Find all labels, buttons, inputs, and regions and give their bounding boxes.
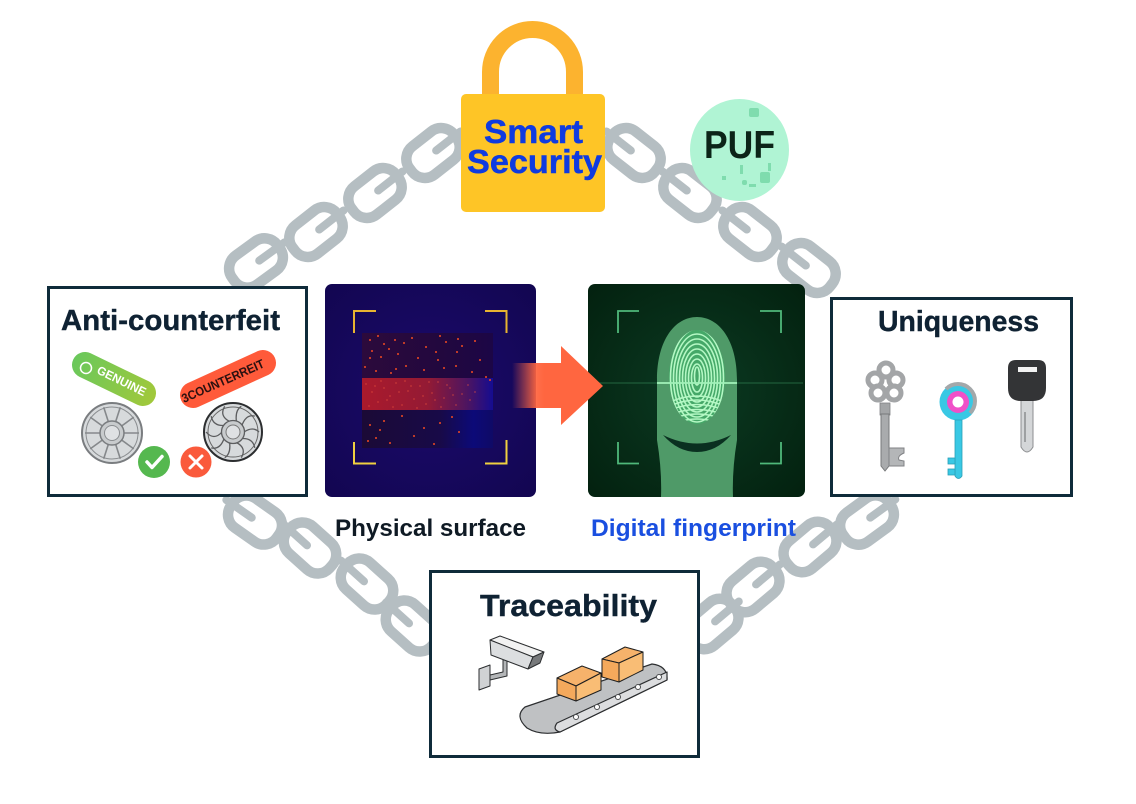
arrow: surface to fingerprint bbox=[512, 346, 603, 425]
panel: digital fingerprint scan bbox=[588, 284, 805, 497]
parcel: rear box bbox=[602, 647, 643, 682]
conveyor belt bbox=[520, 664, 667, 733]
icon: padlock bbox=[461, 30, 605, 212]
icon: cross mark bbox=[180, 446, 212, 478]
counterfeit label: 3COUNTERREIT bbox=[180, 357, 267, 406]
scan line bbox=[590, 382, 803, 384]
padlock label: Smart bbox=[484, 113, 583, 150]
heading: anti-counterfeit: Anti-counterfeit bbox=[61, 305, 280, 337]
caption: digital fingerprint: Digital fingerprint bbox=[591, 515, 796, 542]
icon: cyan key bbox=[940, 384, 976, 478]
scan corner brackets bbox=[618, 311, 781, 464]
icon: car key bbox=[1008, 360, 1046, 452]
badge: PUF bbox=[690, 99, 789, 201]
counterfeit wheel bbox=[204, 403, 262, 461]
heading: traceability: Traceability bbox=[480, 588, 658, 623]
chain: upper left bbox=[223, 117, 472, 294]
panel: physical surface scan bbox=[325, 284, 536, 497]
chain: upper right bbox=[595, 117, 842, 299]
chain: lower left bbox=[216, 485, 445, 658]
nail crescent bbox=[663, 435, 731, 452]
caption: physical surface: Physical surface bbox=[335, 515, 526, 542]
finger bbox=[657, 317, 737, 497]
scan corner brackets bbox=[354, 311, 506, 464]
icon: security camera bbox=[479, 636, 544, 690]
panel: anti-counterfeit bbox=[48, 288, 306, 496]
fingerprint bbox=[669, 329, 725, 427]
icon: ornate key bbox=[868, 363, 904, 471]
genuine label: GENUINE bbox=[95, 363, 148, 399]
parcel: front box bbox=[557, 666, 601, 701]
chain: lower right bbox=[679, 485, 906, 656]
panel: traceability bbox=[430, 572, 698, 756]
icon: check mark bbox=[138, 446, 170, 478]
padlock body bbox=[461, 94, 605, 212]
heading: uniqueness: Uniqueness bbox=[878, 306, 1039, 338]
padlock label bbox=[467, 113, 603, 180]
padlock label: Security bbox=[467, 143, 603, 180]
surface sample bbox=[362, 333, 493, 448]
padlock shackle bbox=[490, 30, 574, 96]
badge: PUF: PUF bbox=[704, 124, 775, 167]
genuine wheel bbox=[82, 403, 142, 463]
panel: uniqueness bbox=[832, 298, 1072, 496]
